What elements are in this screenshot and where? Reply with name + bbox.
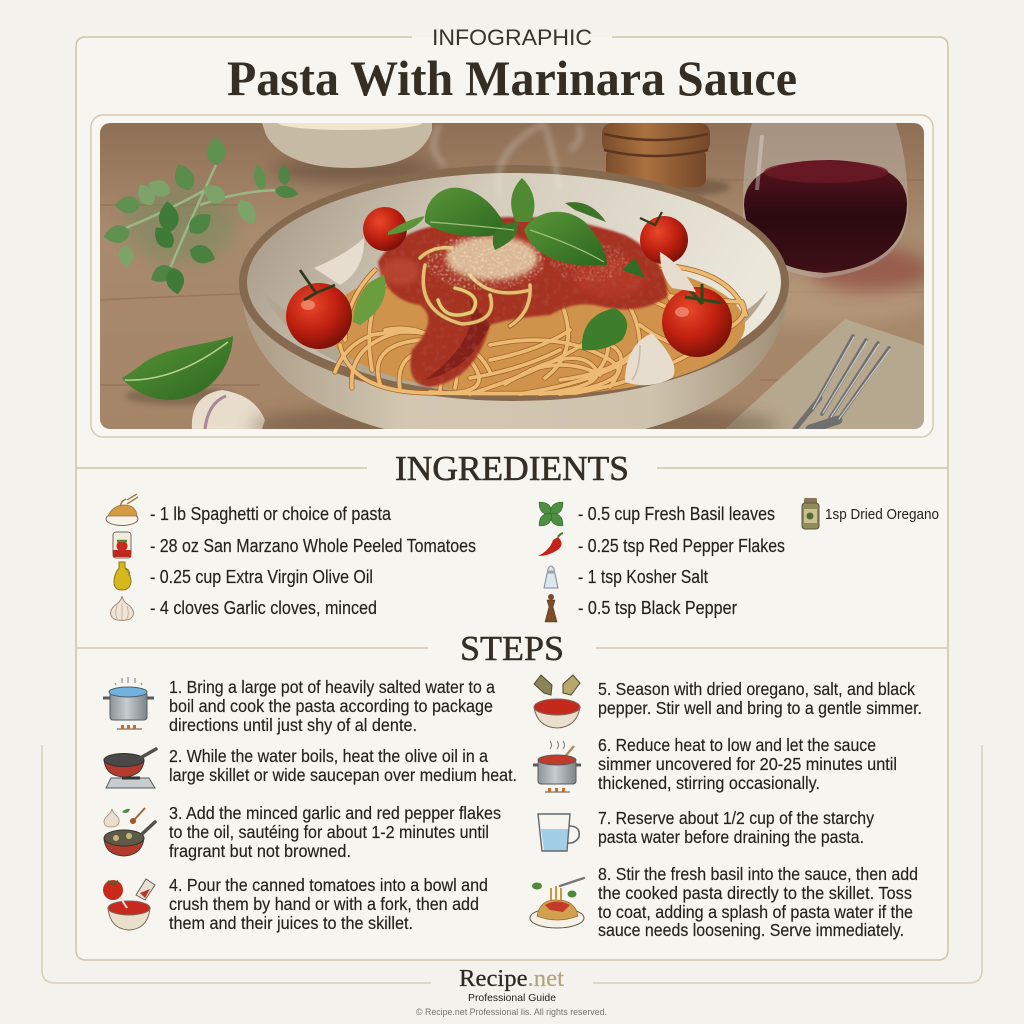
main bowl — [239, 165, 789, 447]
ingredients list left — [106, 494, 476, 620]
fork — [795, 336, 890, 429]
step 6 — [598, 735, 897, 793]
icon: pasta with fork — [530, 878, 584, 928]
main card — [76, 37, 948, 960]
step 7: pasta water before draining the pasta. — [598, 827, 864, 847]
icon: garlic and skillet — [104, 808, 155, 856]
step 4 — [169, 875, 488, 933]
step 4: them and their juices to the skillet. — [169, 913, 413, 933]
napkin — [725, 319, 924, 429]
icon: seasoning bowl — [534, 675, 580, 728]
basil garnish — [353, 178, 645, 350]
parmesan — [425, 234, 630, 290]
steam — [429, 123, 585, 175]
icon: simmering pot — [533, 741, 581, 792]
garlic clove on table — [192, 390, 265, 429]
steps left column — [103, 677, 517, 933]
outer frame — [42, 745, 982, 983]
text: black pepper: - 0.5 tsp Black Pepper — [578, 598, 737, 618]
step 2: large skillet or wide saucepan over medium heat. — [169, 765, 517, 785]
footer brand: Recipe.net — [459, 966, 564, 992]
step 6: thickened, stirring occasionally. — [598, 773, 820, 793]
loose basil leaf — [122, 336, 235, 405]
icon: basil — [536, 499, 566, 529]
step 1: boil and cook the pasta according to package — [169, 696, 493, 716]
ingredients list right — [536, 498, 939, 622]
step 6: simmer uncovered for 20-25 minutes until — [598, 754, 897, 774]
tomatoes — [286, 207, 732, 357]
step 8: sauce needs loosening. Serve immediately. — [598, 920, 904, 940]
step 8: 8. Stir the fresh basil into the sauce, then add — [598, 864, 918, 884]
step 3: to the oil, sautéing for about 1-2 minutes until — [169, 822, 489, 842]
step 3: 3. Add the minced garlic and red pepper flakes — [169, 803, 501, 823]
footer brand — [416, 966, 607, 1018]
text: spaghetti: - 1 lb Spaghetti or choice of pasta — [150, 504, 392, 524]
spaghetti — [325, 255, 746, 395]
step 8: to coat, adding a splash of pasta water if the — [598, 902, 913, 922]
step 8 — [598, 864, 918, 940]
icon: tomato can — [113, 532, 131, 558]
step 1 — [169, 677, 495, 735]
icon: oregano jar — [802, 498, 819, 529]
step 3 — [169, 803, 501, 861]
icon: cup of water — [538, 814, 579, 851]
eyebrow: INFOGRAPHIC: INFOGRAPHIC — [432, 25, 592, 50]
icon: garlic — [110, 596, 134, 620]
step 1: directions until just shy of al dente. — [169, 715, 417, 735]
divider: steps — [76, 647, 948, 649]
step 5: pepper. Stir well and bring to a gentle simmer. — [598, 698, 922, 718]
step 4: crush them by hand or with a fork, then add — [169, 894, 479, 914]
step 2: 2. While the water boils, heat the olive oil in a — [169, 746, 488, 766]
marinara sauce — [378, 217, 668, 387]
garlic cloves in bowl — [314, 238, 696, 385]
pasta over sauce — [420, 248, 530, 326]
icon: pepper mill — [545, 594, 557, 622]
icon: pasta plate — [106, 494, 138, 526]
title: Pasta With Marinara Sauce — [227, 50, 797, 106]
step 5 — [598, 679, 922, 718]
steps right column — [530, 675, 922, 940]
oregano sprig — [102, 137, 299, 296]
pepper mill — [602, 123, 730, 196]
text: oregano: 1sp Dried Oregano — [825, 507, 939, 523]
photo frame — [91, 115, 933, 437]
heading: ingredients: INGREDIENTS — [395, 449, 629, 488]
text: garlic: - 4 cloves Garlic cloves, minced — [150, 598, 377, 618]
step 2 — [169, 746, 517, 785]
step 7 — [598, 808, 874, 847]
photo: pasta with marinara — [100, 116, 930, 447]
icon: tomato and bowl — [103, 879, 155, 930]
step 4: 4. Pour the canned tomatoes into a bowl and — [169, 875, 488, 895]
step 6: 6. Reduce heat to low and let the sauce — [598, 735, 876, 755]
text: tomatoes: - 28 oz San Marzano Whole Peeled Tomatoes — [150, 536, 476, 556]
copyright: © Recipe.net Professional Iis. All rights reserved. — [416, 1007, 607, 1018]
heading: steps: STEPS — [460, 629, 564, 668]
step 8: the cooked pasta directly to the skillet. Toss — [598, 883, 912, 903]
divider: ingredients — [76, 467, 948, 469]
text: basil: - 0.5 cup Fresh Basil leaves — [578, 504, 775, 524]
step 5: 5. Season with dried oregano, salt, and black — [598, 679, 915, 699]
icon: boiling pot — [103, 677, 154, 729]
footer subtitle: Professional Guide — [468, 992, 556, 1004]
text: olive oil: - 0.25 cup Extra Virgin Olive Oil — [150, 567, 373, 587]
text: salt: - 1 tsp Kosher Salt — [578, 567, 708, 587]
icon: pan on stove — [104, 749, 156, 788]
wine glass — [743, 123, 930, 292]
step 1: 1. Bring a large pot of heavily salted water to a — [169, 677, 495, 697]
icon: olive oil bottle — [114, 562, 131, 590]
text: pepper flakes: - 0.25 tsp Red Pepper Flakes — [578, 536, 785, 556]
step 7: 7. Reserve about 1/2 cup of the starchy — [598, 808, 874, 828]
step 3: fragrant but not browned. — [169, 841, 351, 861]
icon: salt shaker — [544, 566, 558, 588]
small bowl behind — [262, 116, 440, 182]
wooden table — [100, 123, 930, 429]
icon: chili — [538, 533, 563, 556]
